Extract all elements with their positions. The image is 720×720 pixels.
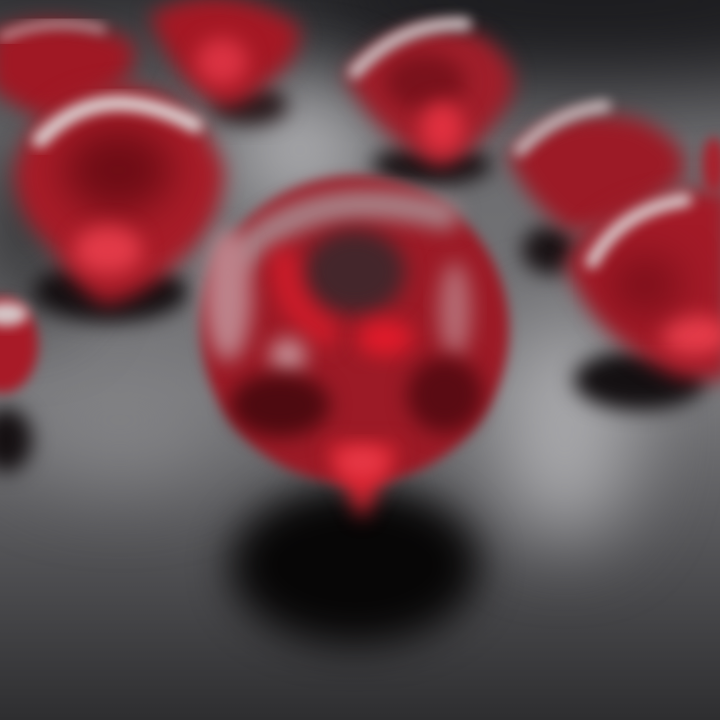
gem: far left: [0, 297, 38, 393]
shadow: back left gem: [212, 85, 288, 125]
gem: right: [566, 137, 720, 380]
facet: right glint: [439, 262, 471, 358]
shadow: left gem: [32, 262, 188, 322]
gem: back centre: [345, 24, 514, 168]
shadow: back right gem: [522, 226, 578, 274]
gem: back right: [508, 106, 684, 232]
shadow: back centre gem: [372, 145, 492, 185]
gem: main central ruby: [201, 176, 509, 520]
facet: white glint: [270, 338, 306, 374]
gem: top left: [0, 21, 134, 118]
highlight: upper rim: [235, 204, 445, 260]
facet: bottom point glow: [325, 445, 400, 520]
shadow: right gem: [574, 350, 706, 410]
facet: bright red centre: [357, 320, 413, 356]
facet: dark lower left: [230, 373, 330, 437]
highlight: left edge: [204, 229, 252, 361]
gem: top centre left: [150, 0, 299, 108]
shadow: far left gem: [0, 408, 32, 472]
shadow: main gem: [230, 485, 480, 645]
facet: left bright arc: [284, 250, 335, 338]
facet: dark lower right: [407, 357, 483, 433]
gem: left: [15, 85, 224, 305]
facet: dark centre: [305, 230, 405, 314]
